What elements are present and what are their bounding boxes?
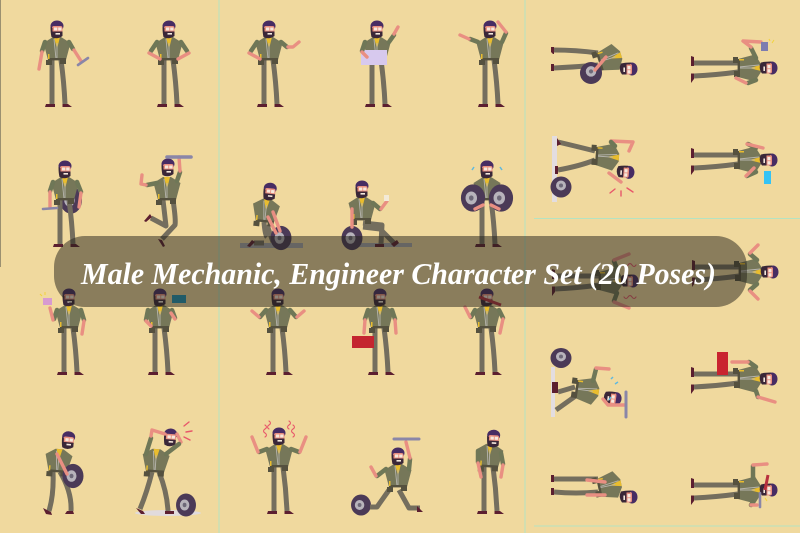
pose 8: kneeling at tyre bbox=[240, 181, 303, 250]
pose 15: holding red pipe wrench bbox=[465, 288, 503, 375]
rotated pose: frustrated with waves bbox=[552, 254, 638, 308]
pose 4: holding sign bbox=[361, 20, 398, 107]
pose 13: shrugging bbox=[252, 288, 304, 375]
left edge line bbox=[0, 0, 1, 267]
rotated pose: pipe wrench bbox=[691, 464, 778, 507]
pose 7: jumping with spanner bbox=[141, 157, 191, 247]
pose 20: slouching tired bbox=[475, 429, 504, 514]
pose 6: carrying tyre bbox=[43, 160, 82, 247]
rotated pose: bending over tyre bbox=[551, 42, 638, 84]
title banner bbox=[54, 236, 747, 307]
rotated pose: kneeling with spanner bbox=[550, 348, 626, 417]
pose 11: looking at phone bbox=[40, 288, 84, 375]
pose 17: despair over flat tyre bbox=[135, 422, 201, 517]
title: Male Mechanic, Engineer Character Set (20 Poses) bbox=[80, 256, 716, 291]
rotated pose: drooping, looking down bbox=[551, 470, 638, 504]
pose 2: hands on hips bbox=[149, 20, 189, 107]
rotated pose: red toolbox bbox=[691, 352, 778, 402]
rotated pose: despair with tyre on wall bbox=[550, 136, 636, 202]
pose 18: furious, arms raised bbox=[252, 421, 306, 514]
pose 1: holding wrench bbox=[39, 20, 88, 107]
pose 14: carrying red toolbox bbox=[352, 288, 396, 375]
rotated pose: arms out shrug bbox=[692, 245, 778, 299]
pose 9: sitting on tyre with coffee bbox=[342, 180, 412, 250]
rotated pose: phone held up bbox=[691, 39, 778, 83]
pose 19: kneeling with spanner raised bbox=[351, 439, 423, 516]
guide lines bbox=[219, 0, 800, 533]
pose 10: holding two tyres bbox=[461, 160, 513, 247]
pose 16: rolling tyre bbox=[43, 429, 84, 515]
pose 12: holding card bbox=[146, 288, 186, 375]
pose 3: pointing bbox=[249, 20, 299, 107]
rotated pose: using tablet bbox=[691, 144, 778, 184]
pose 5: scratching head bbox=[460, 20, 506, 107]
